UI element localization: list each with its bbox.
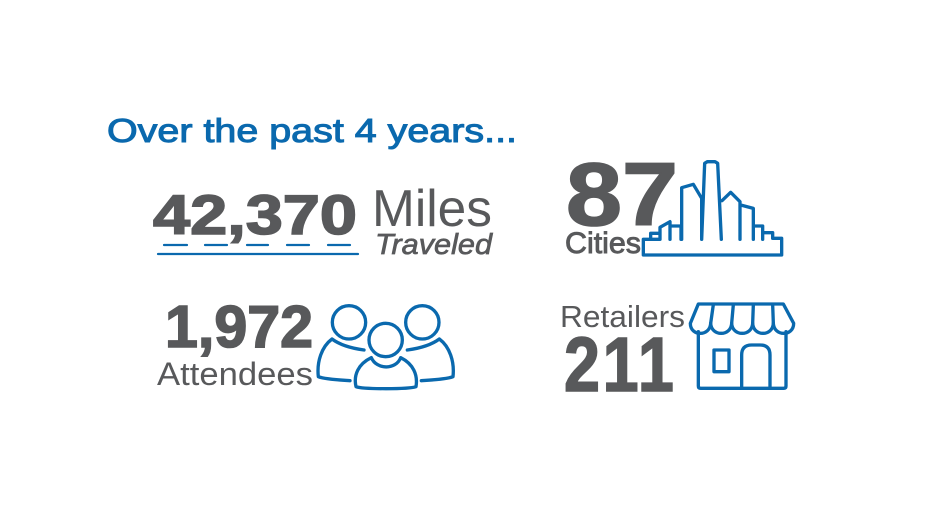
number: 42,370: 42,370 xyxy=(153,183,357,246)
icon: road lines xyxy=(158,245,358,254)
stat: miles traveled xyxy=(153,180,493,261)
stat: cities xyxy=(565,144,782,260)
label: Miles: Miles xyxy=(372,180,492,238)
stat: attendees xyxy=(157,294,453,392)
label: Traveled: Traveled xyxy=(375,229,493,261)
label: Cities: Cities xyxy=(565,227,641,260)
icon: group of people xyxy=(318,306,453,389)
icon: city skyline xyxy=(643,162,782,255)
icon: storefront xyxy=(690,304,794,388)
label: Retailers: Retailers xyxy=(560,299,685,334)
label: Attendees: Attendees xyxy=(157,356,313,392)
number: 211: 211 xyxy=(564,323,674,408)
stat: retailers xyxy=(560,299,794,408)
number: 1,972: 1,972 xyxy=(165,294,313,360)
number: 87: 87 xyxy=(566,144,678,244)
title: Over the past 4 years... xyxy=(107,112,517,149)
